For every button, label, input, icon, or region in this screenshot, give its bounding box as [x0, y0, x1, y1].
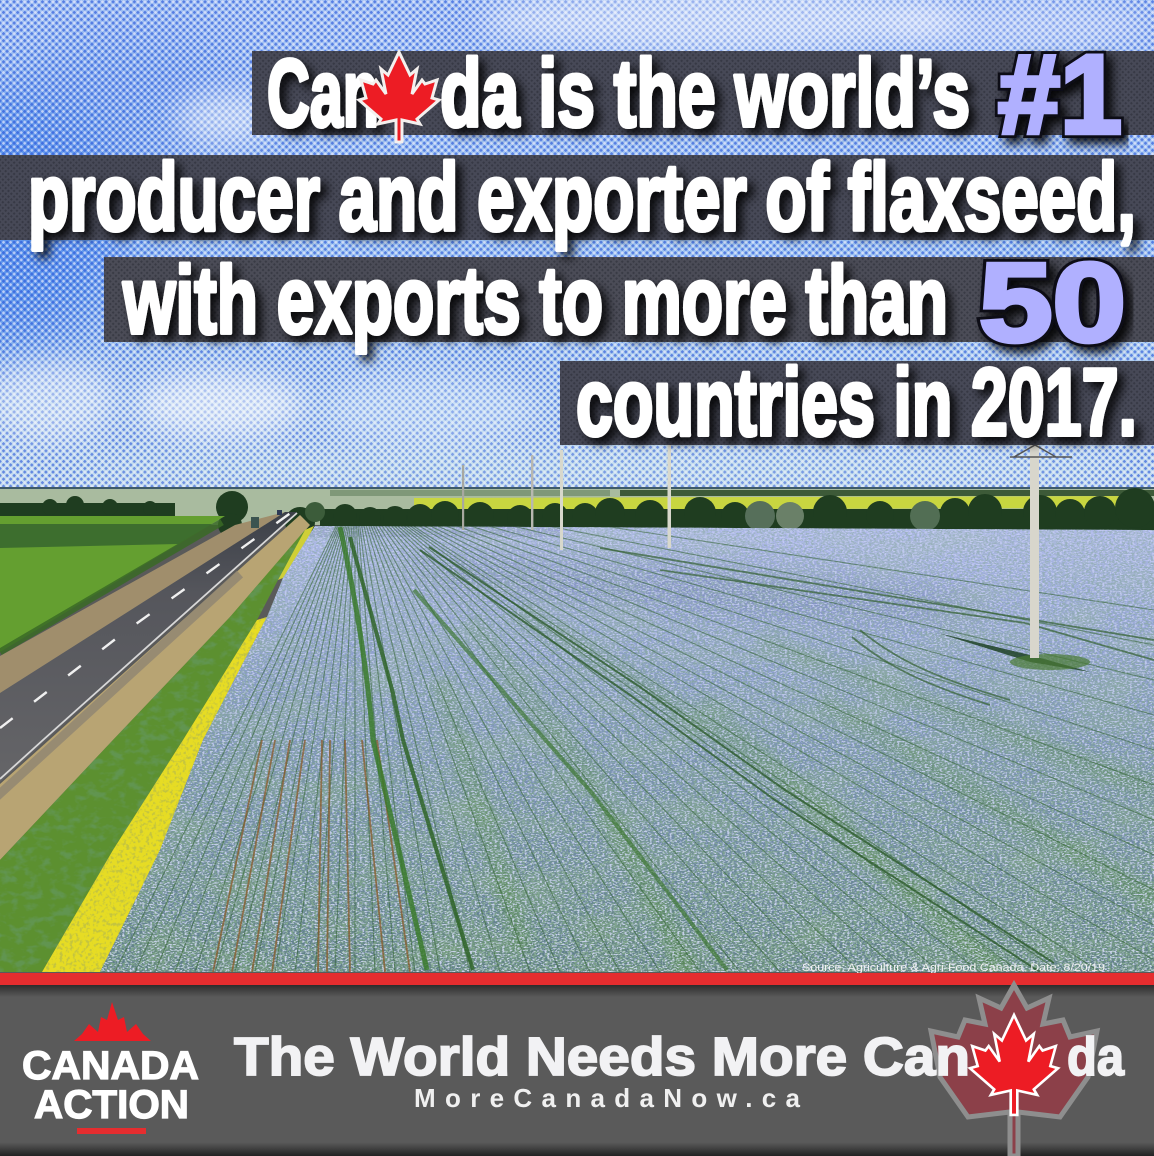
headline bars: [0, 51, 1154, 445]
footer red maple leaf: [970, 1015, 1058, 1115]
road and verges: [0, 510, 310, 860]
icon: maple leaf in headline: [359, 52, 439, 142]
footer background maple leaf: [931, 985, 1097, 1156]
source credit: Source: Agriculture & Agri-Food Canada. Date: 8/20/19: [802, 962, 1105, 974]
green streaks: [440, 610, 1154, 972]
Canada Action logo: [22, 1002, 199, 1134]
footer slogan: The World Needs More Can: [234, 1027, 970, 1087]
highlight number: #1: #1: [998, 32, 1122, 157]
footer slogan: da: [1067, 1027, 1125, 1087]
highlight number: #1: #1: [998, 32, 1122, 157]
left green crop field: [0, 516, 225, 652]
power poles: [462, 440, 1090, 672]
brown soil rows: [213, 740, 410, 972]
crop rows: [115, 488, 1154, 972]
yellow canola strip: [30, 526, 314, 975]
footer website: MoreCanadaNow.ca: [414, 1083, 801, 1113]
flax field: [100, 526, 1154, 972]
roadside grass strip: [0, 520, 330, 975]
sky background with halftone and clouds: [0, 0, 1154, 490]
highlight number: 50: 50: [979, 240, 1126, 365]
logo wordmark: CANADA: [22, 1044, 199, 1088]
headline text: Can: [267, 40, 379, 147]
logo wordmark: ACTION: [34, 1083, 189, 1127]
highlight number: 50: 50: [979, 240, 1126, 365]
tree line: [0, 488, 1154, 537]
distant horizon farmland: [0, 487, 1154, 525]
headline text: [28, 40, 1137, 456]
tractor tracks: [340, 527, 427, 970]
logo leaf: [74, 1002, 151, 1041]
logo underline: [77, 1128, 146, 1134]
footer red stripe: [0, 973, 1154, 985]
logo wordmark: [22, 1044, 199, 1127]
footer panel: [0, 985, 1154, 1156]
